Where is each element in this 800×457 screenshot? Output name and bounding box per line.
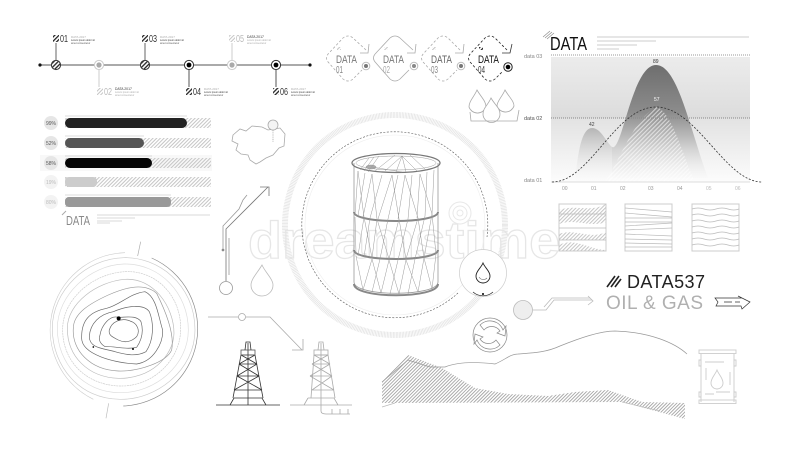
terrain outline: [382, 331, 687, 382]
chart heading: [543, 31, 749, 54]
contour inner lines: [73, 287, 172, 371]
icon: wireframe oil barrel: [352, 154, 440, 295]
icon: oil drop: [251, 265, 273, 296]
timeline node 05: [227, 60, 237, 70]
chart values: 89: [653, 59, 659, 65]
x axis labels: 04: [677, 186, 683, 192]
contour map: [50, 242, 198, 418]
diamond 01: DATA: [336, 54, 357, 66]
bar row 5: [44, 195, 211, 209]
diamond 02: DATA: [383, 54, 404, 66]
diamond 02: 02: [383, 65, 390, 76]
y axis labels: data 03: [524, 54, 542, 60]
timeline label 01: [53, 34, 95, 45]
x axis labels: 00: [562, 186, 568, 192]
chart heading: DATA: [550, 34, 587, 54]
area chart: [524, 54, 762, 192]
timeline label 06: 06: [280, 87, 288, 98]
diamond 04: DATA: [478, 54, 499, 66]
timeline label 03: [142, 34, 184, 45]
timeline label 04: DATA 2017: [204, 87, 219, 91]
peak 42: [575, 128, 640, 182]
chart values: [589, 59, 660, 128]
rings around barrel: [285, 115, 505, 335]
chart values: 42: [589, 122, 595, 128]
x axis labels: 03: [648, 186, 654, 192]
dashed curve: [552, 107, 762, 182]
bar row 4: 19%: [46, 180, 57, 186]
bar row 3: [44, 156, 211, 170]
bar row 2: [44, 136, 211, 150]
terrain profile: [382, 331, 687, 419]
contour outer arcs: [50, 253, 198, 406]
diamond 04: 04: [478, 65, 485, 76]
timeline label 04: [186, 87, 228, 98]
timeline label 02: 02: [104, 87, 112, 98]
peak 89: [612, 65, 708, 178]
hatched area: [605, 107, 695, 182]
timeline label 06: [273, 87, 315, 98]
icon: three oil drops on tray: [469, 90, 519, 122]
icon: recycle loop: [473, 318, 507, 352]
timeline label 02: [97, 87, 139, 98]
timeline: [38, 34, 315, 98]
timeline label 06: amet consectetur: [291, 94, 310, 97]
timeline label 05: amet consectetur: [247, 42, 266, 45]
timeline label 03: 03: [149, 34, 157, 45]
hatched terrain: [382, 355, 685, 419]
x axis labels: 02: [620, 186, 626, 192]
icon: small oil barrel: [699, 350, 736, 404]
timeline label 05: Lorem ipsum dolor sit: [247, 39, 271, 42]
chart values: 57: [654, 97, 660, 103]
timeline label 05: 05: [236, 34, 244, 45]
timeline label 06: DATA 2017: [291, 87, 306, 91]
timeline label 01: Lorem ipsum dolor sit: [71, 39, 95, 42]
diamond data tags: [326, 36, 512, 81]
timeline label 05: [229, 34, 271, 45]
timeline node 01: [51, 60, 61, 70]
x axis labels: 05: [706, 186, 712, 192]
timeline label 03: DATA 2017: [160, 35, 175, 39]
timeline label 02: Lorem ipsum dolor sit: [115, 91, 139, 94]
progress bars: [40, 116, 212, 228]
watermark: dreamstime: [248, 212, 560, 270]
x axis labels: 06: [735, 186, 741, 192]
connector circle with arrow: [514, 296, 593, 320]
diamond 01: 01: [336, 65, 343, 76]
texture panel 1: [559, 204, 606, 251]
diamond 04: [468, 36, 512, 81]
bar row 4: [44, 175, 211, 189]
timeline label 02: amet consectetur: [115, 94, 134, 97]
chart background: [551, 57, 750, 182]
bars caption: DATA: [66, 213, 90, 228]
timeline label 05: DATA 2017: [247, 35, 264, 39]
timeline label 06: Lorem ipsum dolor sit: [291, 91, 315, 94]
y axis labels: [524, 54, 542, 184]
title: data537: DATA537: [627, 272, 705, 292]
bar row 5: 80%: [46, 200, 57, 206]
icon: oil derrick dark: [216, 342, 280, 405]
diamond 01: [326, 36, 370, 81]
timeline label 04: amet consectetur: [204, 94, 223, 97]
diamond 03: DATA: [431, 54, 452, 66]
bar row 1: [44, 116, 211, 130]
timeline label 01: 01: [60, 34, 68, 45]
timeline label 04: Lorem ipsum dolor sit: [204, 91, 228, 94]
arrow: rising line: [220, 187, 269, 294]
timeline label 02: DATA 2017: [115, 87, 132, 91]
timeline label 03: amet consectetur: [160, 42, 179, 45]
texture panels: [559, 204, 739, 251]
connector arrow to derrick: [208, 314, 303, 350]
icon: oil derrick light with pipes: [290, 342, 352, 414]
y axis labels: data 01: [524, 178, 542, 184]
texture panel 2: [625, 204, 672, 251]
subtitle: oil and gas: OIL & GAS: [606, 293, 703, 314]
timeline label 03: Lorem ipsum dolor sit: [160, 39, 184, 42]
bars caption: [62, 211, 210, 228]
timeline label 01: DATA 2017: [71, 35, 86, 39]
arrow: outlined right arrow: [715, 296, 750, 309]
x axis labels: [562, 186, 741, 192]
timeline label 04: 04: [193, 87, 201, 98]
timeline label 01: amet consectetur: [71, 42, 90, 45]
timeline node 04: [184, 60, 194, 70]
diamond 03: 03: [431, 65, 438, 76]
diamond 03: [422, 36, 465, 81]
bar row 1: 99%: [46, 121, 57, 127]
texture panel 3: [692, 204, 739, 251]
diamond 02: [374, 36, 418, 81]
icon: map with pin: [232, 120, 285, 164]
bar row 2: 52%: [46, 141, 57, 147]
icon: drop badge: [460, 250, 506, 296]
timeline node 03: [140, 60, 150, 70]
timeline node 02: [94, 60, 104, 70]
timeline node 06: [271, 60, 281, 70]
y axis labels: data 02: [524, 116, 542, 122]
arrow start circle: [220, 282, 232, 294]
bar row 3: 58%: [46, 161, 57, 167]
x axis labels: 01: [591, 186, 597, 192]
